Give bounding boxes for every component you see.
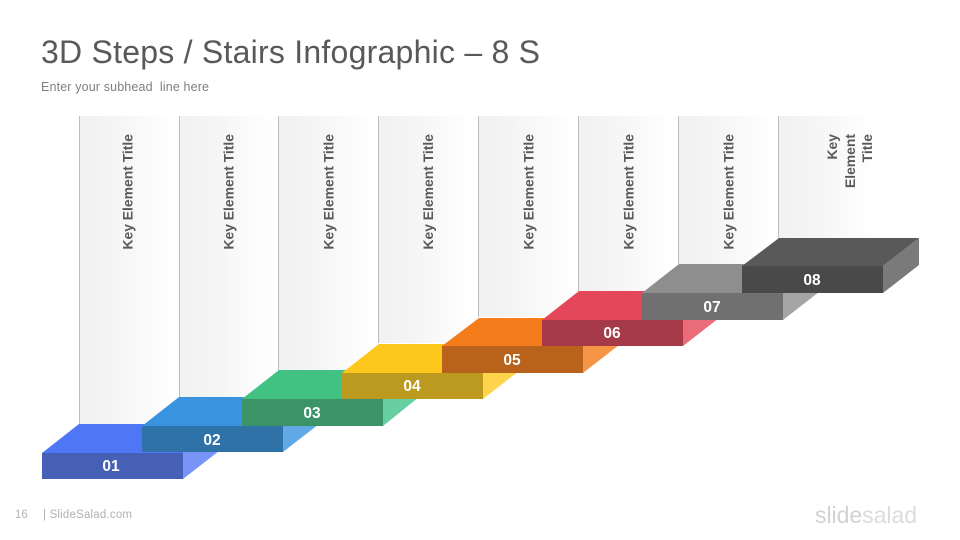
label: step 8 title: Title	[859, 134, 875, 162]
panel: step 3 backdrop	[278, 116, 378, 370]
step 03: 03	[303, 405, 321, 422]
step 05: 05	[503, 352, 521, 369]
step 02: 02	[203, 432, 221, 449]
label: step 1 title: Key Element Title	[120, 134, 136, 250]
label: step 3 title: Key Element Title	[320, 134, 336, 250]
step 03	[242, 370, 419, 426]
panel: step 7 backdrop	[678, 116, 778, 264]
step 05	[442, 318, 619, 373]
label: step 8 title: Key	[824, 134, 840, 159]
step 01	[42, 424, 219, 479]
subhead: Enter your subhead line here	[41, 80, 209, 94]
panel: step 2 backdrop	[180, 116, 280, 397]
step 08: 08	[803, 272, 821, 289]
step 08	[742, 238, 919, 293]
step 07: 07	[703, 299, 721, 316]
label: step 7 title: Key Element Title	[720, 134, 736, 250]
label: step 8 title	[824, 134, 875, 188]
label: step 2 title: Key Element Title	[220, 134, 236, 250]
footer source: | SlideSalad.com	[43, 509, 132, 521]
page number: 16	[15, 509, 28, 521]
panel: step 5 backdrop	[478, 116, 578, 317]
label: step 8 title: Element	[842, 134, 858, 188]
label: step 6 title: Key Element Title	[620, 134, 636, 250]
label: step 5 title: Key Element Title	[520, 134, 536, 250]
panel: step 6 backdrop	[578, 116, 678, 291]
panel: step 1 backdrop	[80, 116, 180, 424]
title: 3D Steps / Stairs Infographic – 8 S	[41, 34, 540, 70]
step 04	[342, 344, 519, 399]
step 07	[642, 264, 819, 320]
panel: step 8 backdrop	[778, 116, 878, 238]
step 01: 01	[102, 458, 120, 475]
step 06	[542, 291, 719, 346]
step 04: 04	[403, 378, 421, 395]
step 02	[142, 397, 319, 452]
label: step 4 title: Key Element Title	[420, 134, 436, 250]
step 06: 06	[603, 325, 621, 342]
panel: step 4 backdrop	[378, 116, 478, 343]
logo wordmark: slidesalad	[815, 502, 917, 528]
